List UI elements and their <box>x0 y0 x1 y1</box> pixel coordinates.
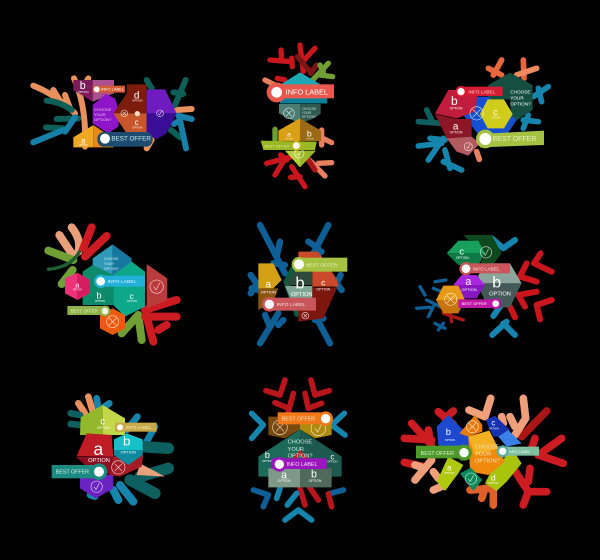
question text: YOUR <box>475 452 491 458</box>
option labels: OPTION <box>285 138 293 140</box>
option labels: b <box>446 427 451 437</box>
option labels: a <box>81 136 86 145</box>
icons <box>107 280 163 328</box>
option labels: OPTION <box>97 426 110 430</box>
question text: OPTION? <box>288 453 313 459</box>
option labels: OPTION <box>132 98 142 102</box>
panel: infographic 8 <box>252 380 345 520</box>
option labels: a <box>453 121 459 132</box>
best offer label <box>416 445 472 461</box>
option labels: a <box>287 132 291 139</box>
option labels <box>78 80 142 147</box>
best offer label: BEST OFFER <box>493 136 536 143</box>
snowflake <box>265 45 333 187</box>
option labels: OPTION <box>306 138 314 140</box>
option labels: OPTION <box>461 287 477 292</box>
question text: OPTION? <box>475 459 500 465</box>
option labels: c <box>459 246 464 256</box>
best offer label: BEST OFFER <box>306 262 338 268</box>
option labels: c <box>321 277 326 287</box>
best offer label <box>261 141 317 151</box>
panel: infographic 3 <box>418 60 548 170</box>
hexagon blocks <box>437 415 522 491</box>
icons <box>465 421 478 484</box>
info label <box>93 86 125 93</box>
option labels: OPTION <box>132 125 142 129</box>
option labels <box>285 129 314 140</box>
panel: infographic 4 <box>48 227 177 342</box>
info label: INFO LABEL <box>126 425 152 430</box>
option labels: OPTION <box>488 481 498 485</box>
option labels: OPTION <box>309 479 322 483</box>
icons <box>91 461 125 492</box>
option labels: OPTION <box>291 292 313 298</box>
option labels: b <box>295 273 305 292</box>
info label: INFO LABEL <box>286 87 328 96</box>
option labels: b <box>492 275 501 292</box>
hexagon blocks <box>435 73 533 156</box>
option labels: d <box>491 473 496 483</box>
option labels: OPTION <box>489 292 511 298</box>
option labels: OPTION <box>450 130 463 134</box>
panel: infographic 9 <box>404 398 563 505</box>
option labels: b <box>96 290 102 300</box>
option labels: c <box>129 291 134 301</box>
info label: INFO LABEL <box>108 279 137 285</box>
option labels: a <box>447 463 452 472</box>
info label: INFO LABEL <box>468 89 496 94</box>
icons <box>121 110 163 117</box>
option labels: OPTION <box>278 479 291 483</box>
question text: YOUR <box>288 447 304 453</box>
hexagon blocks <box>65 244 167 335</box>
snowflake <box>417 238 552 335</box>
info label: INFO LABEL <box>509 450 530 454</box>
info label <box>497 445 539 457</box>
hexagon blocks <box>76 405 143 498</box>
question text: CHOOSE <box>302 107 317 111</box>
question text: CHOOSE <box>510 89 531 94</box>
option labels: b <box>307 129 312 139</box>
option labels: c <box>330 452 334 461</box>
option labels: OPTION <box>262 459 273 463</box>
option labels: b <box>451 94 458 108</box>
option labels: OPTION <box>121 449 136 454</box>
option labels: OPTION <box>327 459 337 463</box>
option labels: b <box>311 469 317 481</box>
icons <box>284 108 304 158</box>
hexagon blocks <box>73 80 177 147</box>
option labels: b <box>265 450 270 460</box>
option labels <box>450 94 501 134</box>
best offer label: BEST OFFER <box>111 136 151 143</box>
option labels: b <box>80 80 86 92</box>
question text: CHOOSE <box>288 440 312 446</box>
question text: OPTION? <box>302 115 316 119</box>
question text: OPTION? <box>104 267 119 271</box>
hexagon blocks <box>436 235 522 313</box>
question text: YOUR <box>302 111 312 115</box>
snowflake <box>71 397 168 502</box>
info label: INFO LABEL <box>277 302 306 308</box>
hexagon blocks <box>258 252 338 322</box>
snowflake <box>252 380 345 520</box>
option labels: OPTION <box>95 299 105 303</box>
snowflake <box>404 398 563 505</box>
option labels: OPTION <box>489 426 499 430</box>
option labels: OPTION <box>88 458 110 464</box>
question text: YOUR <box>510 95 524 100</box>
option labels: c <box>491 419 495 428</box>
peach accent <box>137 463 165 477</box>
option labels <box>456 246 511 298</box>
icons <box>464 107 483 151</box>
option labels: OPTION <box>445 438 455 442</box>
option labels: OPTION <box>79 145 88 147</box>
best offer label: BEST OFFER <box>56 470 89 476</box>
panel: infographic 7 <box>52 397 168 502</box>
option labels <box>88 416 136 464</box>
hexagon blocks <box>278 72 327 167</box>
option labels: c <box>493 107 498 117</box>
question text: CHOOSE <box>475 444 500 450</box>
icons <box>273 420 326 436</box>
snowflake <box>48 227 177 342</box>
question text: OPTION? <box>510 101 531 106</box>
question text: OPTION? <box>94 117 112 122</box>
option labels: a <box>281 469 287 481</box>
info label: INFO LABEL <box>101 87 125 92</box>
question text: YOUR <box>104 262 114 266</box>
question text: CHOOSE <box>104 257 119 261</box>
icon: cross <box>302 312 309 319</box>
option labels: c <box>100 416 105 427</box>
option labels: a <box>75 281 80 290</box>
option labels <box>444 419 499 485</box>
option labels: OPTION <box>492 117 501 119</box>
panel: infographic 1 <box>33 78 192 148</box>
snowflake <box>251 225 342 343</box>
panel: infographic 5 <box>251 225 347 343</box>
option labels: OPTION <box>316 288 331 292</box>
option labels <box>261 273 331 298</box>
option labels: OPTION <box>444 471 454 475</box>
option labels: OPTION <box>127 299 137 303</box>
snowflake <box>33 78 192 148</box>
option labels: a <box>266 279 272 290</box>
question text: CHOOSE <box>94 107 112 112</box>
option labels: a <box>94 439 104 459</box>
info label: INFO LABEL <box>473 266 500 271</box>
info label <box>267 82 334 102</box>
best offer label: BEST OFFER <box>282 417 315 423</box>
option labels <box>73 281 137 303</box>
best offer label: BEST OFFER <box>462 301 487 306</box>
option labels: OPTION <box>73 290 82 292</box>
option labels <box>262 450 337 483</box>
info label: INFO LABEL <box>287 462 317 468</box>
best offer label: BEST OFFER <box>421 451 454 457</box>
icons <box>445 247 492 305</box>
option labels: OPTION <box>450 106 463 110</box>
hexagon blocks <box>258 417 342 487</box>
option labels: OPTION <box>78 90 88 94</box>
option labels: c <box>135 118 139 127</box>
panel: infographic 2 <box>261 45 334 187</box>
snowflake <box>418 60 548 170</box>
option labels: OPTION <box>456 256 469 260</box>
option labels: d <box>134 90 139 101</box>
option labels: a <box>465 276 471 288</box>
panel: infographic 6 <box>417 235 552 335</box>
question text: YOUR <box>94 112 106 117</box>
best offer label: BEST OFFER <box>264 143 289 148</box>
best offer label <box>97 132 153 147</box>
best offer label: BEST OFFER <box>71 308 98 313</box>
option labels: b <box>123 434 130 449</box>
option labels: OPTION <box>261 289 276 294</box>
